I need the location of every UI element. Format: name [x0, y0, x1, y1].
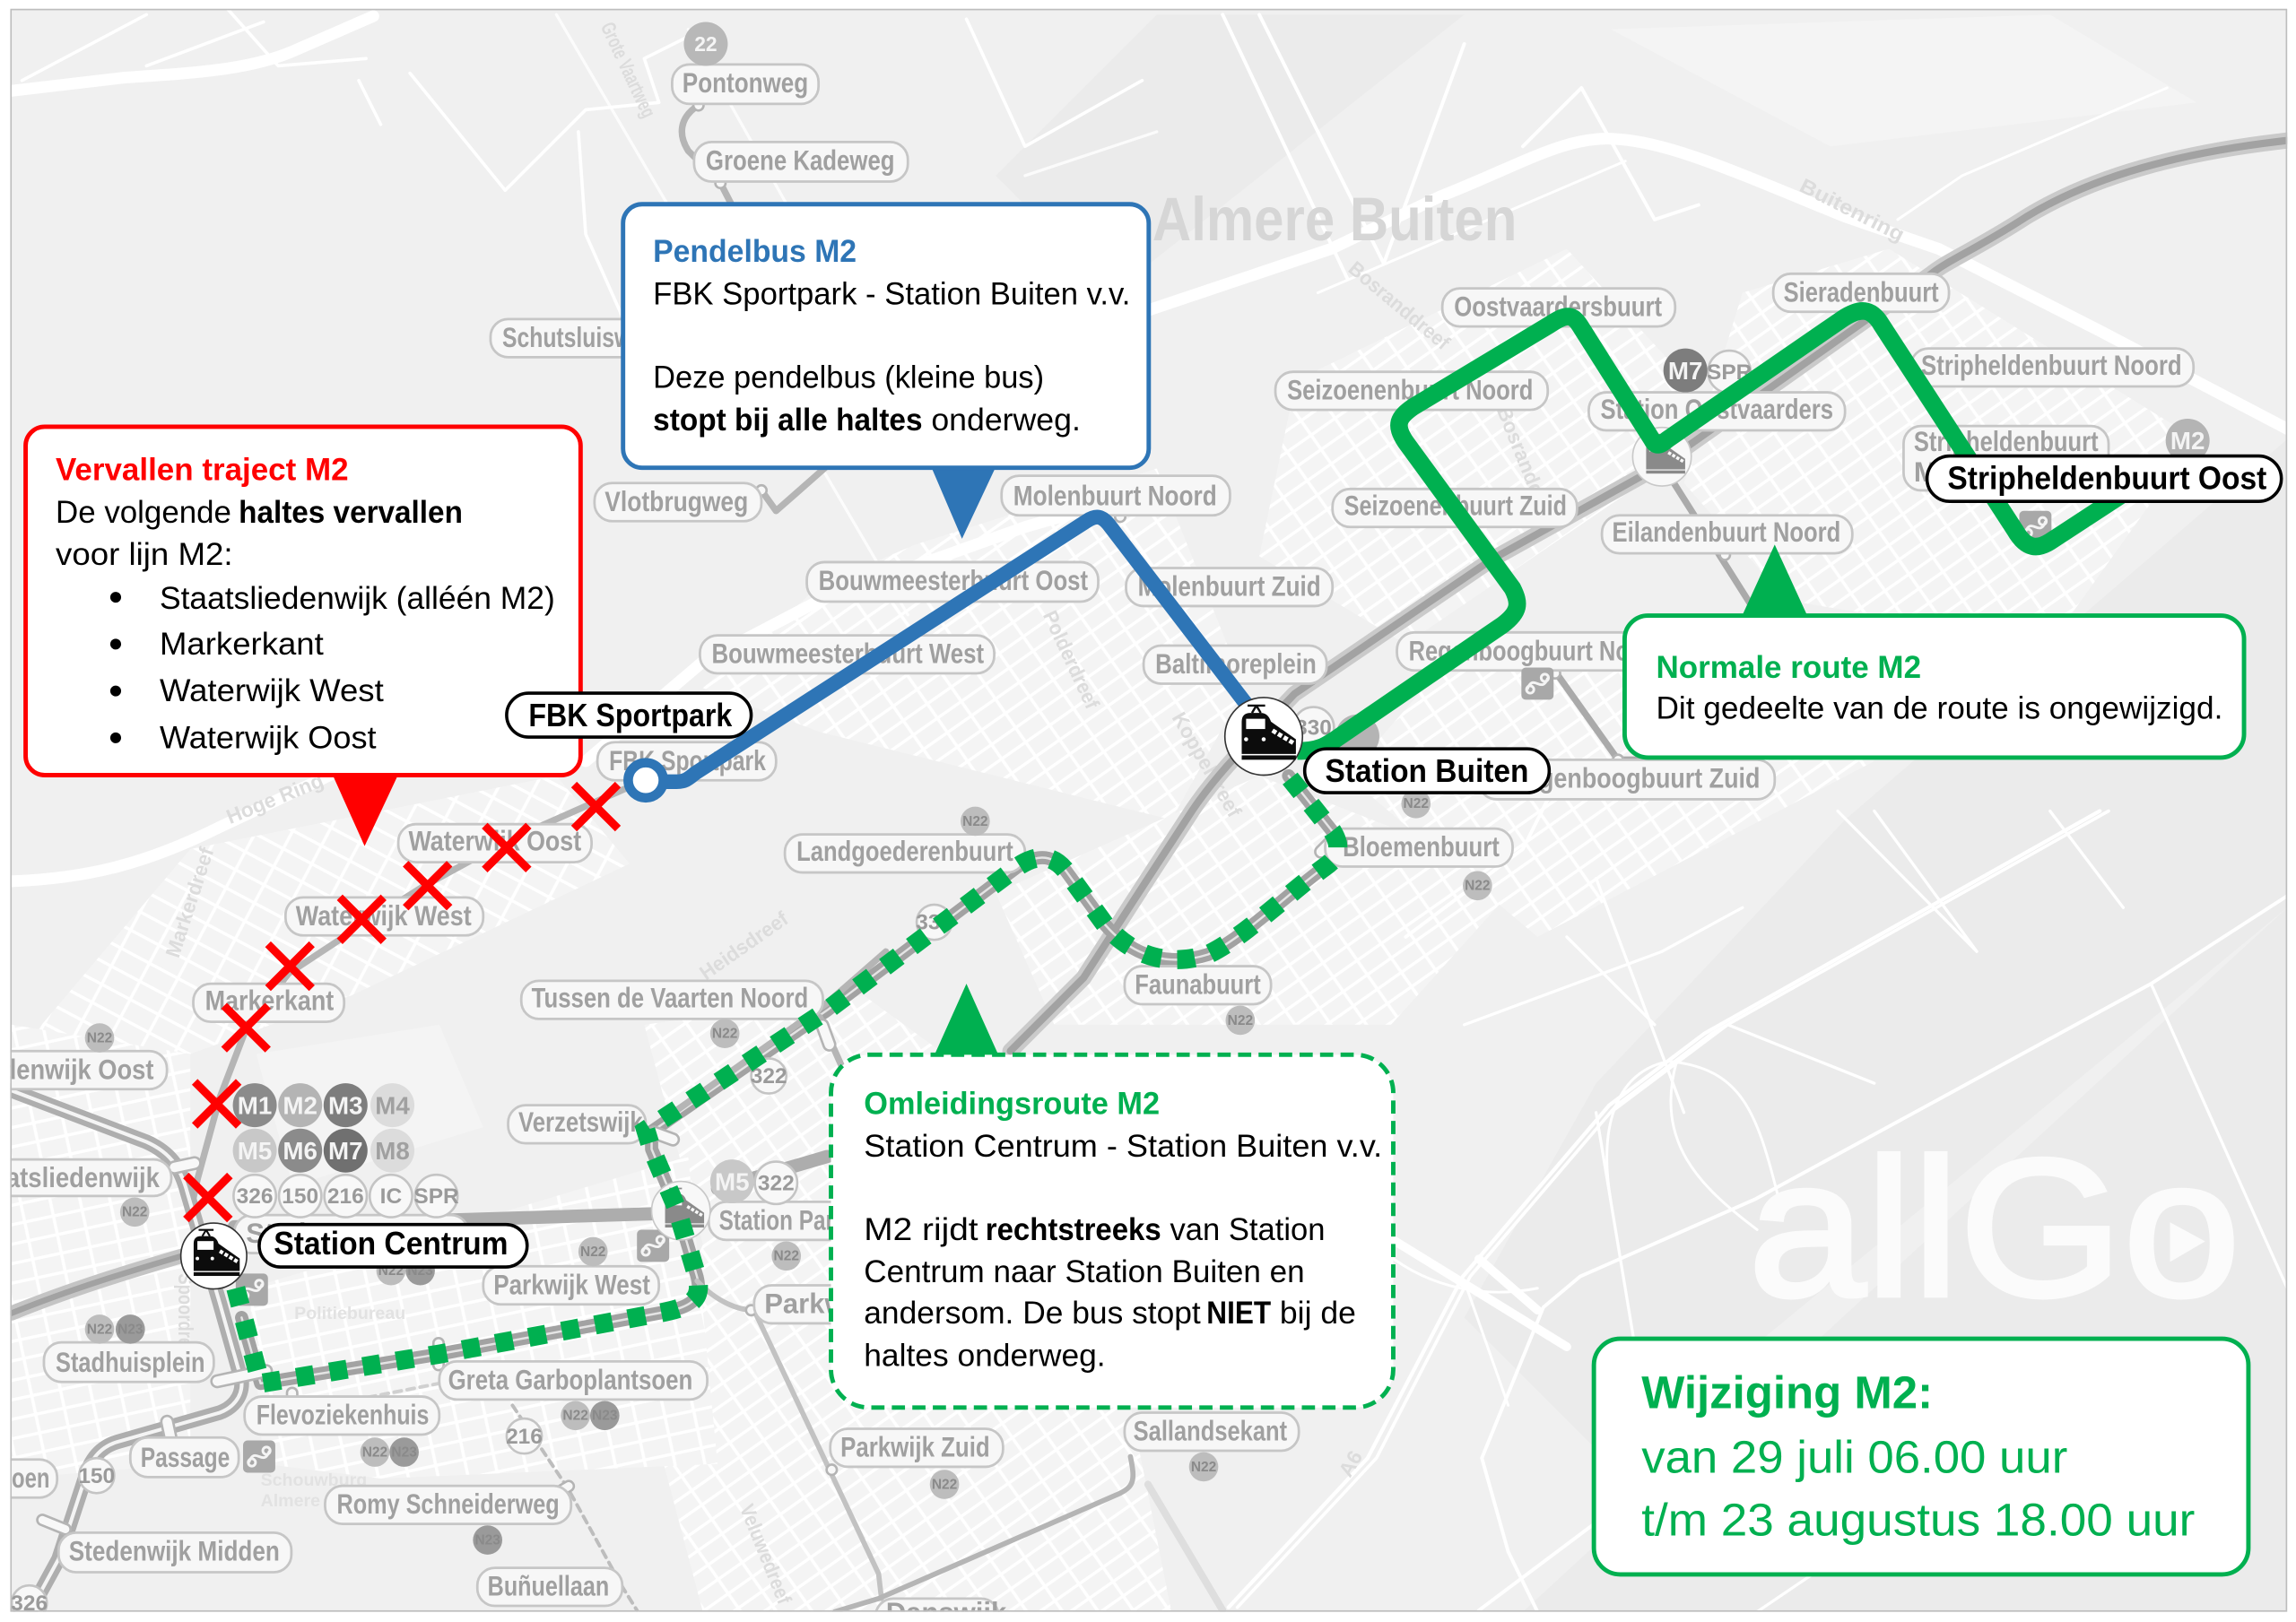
rail and road labels: Bosranddreef: [1492, 403, 1563, 534]
stop: FBK Sportpark: [597, 742, 776, 780]
badges: bus lines Station Centrum: 330: [916, 911, 952, 935]
rail and road labels: Buitenring: [1796, 174, 1909, 247]
badges: N22 and N23 night lines: N22: [712, 1027, 737, 1042]
badges: N22 and N23 night lines: N22: [562, 1409, 588, 1424]
stop: Station Centrum: Station Centrum: [246, 1218, 463, 1249]
rail and road labels: Hoge Ring: [222, 768, 326, 828]
badges: bus lines Station Centrum: 150: [282, 1184, 318, 1209]
panel: omleidingsroute M2: van Station: [1170, 1212, 1326, 1247]
badges: bus lines Station Centrum: SPR: [413, 1184, 459, 1209]
stop: Oostvaardersbuurt: Oostvaardersbuurt: [1454, 291, 1662, 323]
panel: vervallen traject M2: De volgende: [56, 495, 231, 530]
badges: metrobus lines Station Centrum: [233, 1083, 414, 1173]
stop: Romy Schneiderweg: Romy Schneiderweg: [337, 1488, 560, 1520]
rail and road labels: Politiebureau: [294, 1304, 405, 1323]
panel: omleidingsroute M2: bij de: [1280, 1296, 1356, 1331]
badges: N22 and N23 night lines: N22: [580, 1245, 605, 1260]
stop: Tussen de Vaarten Noord: Tussen de Vaarten Noord: [532, 982, 808, 1013]
panel: pendelbus M2: stopt bij alle haltes: [653, 403, 923, 438]
badges: metrobus lines Station Centrum: M5: [238, 1137, 272, 1165]
badges: bus lines Station Centrum: 330: [1295, 716, 1332, 741]
badges: N22 and N23 night lines: N22: [1465, 879, 1491, 894]
stop: Seizoenenbuurt Zuid: Seizoenenbuurt Zuid: [1344, 490, 1567, 522]
badges: N22 and N23 night lines: N22: [1191, 1460, 1216, 1475]
badges: bus lines Station Centrum: 150: [78, 1464, 115, 1488]
badges: N22 and N23 night lines: N23: [117, 1322, 144, 1337]
stop: Regenboogbuurt Noord: Regenboogbuurt Noord: [1409, 635, 1666, 666]
stop: Pontonweg: Pontonweg: [683, 67, 808, 99]
red crosses: cancelled stops: [186, 785, 618, 1219]
badges: N22 and N23 night lines: N23: [474, 1532, 500, 1548]
panel: pendelbus M2: Pendelbus M2: [653, 234, 857, 269]
stop: Bouwmeesterbuurt Oost: [807, 562, 1098, 602]
rail and road labels: A6: [1334, 1446, 1367, 1480]
stop: Groene Kadeweg: [694, 142, 908, 181]
stop: Groene Kadeweg: Groene Kadeweg: [706, 144, 895, 176]
panel: vervallen traject M2: voor lijn M2:: [56, 537, 233, 572]
rail and road labels: Markerdreef: [161, 844, 218, 960]
stop: Molenbuurt Zuid: Molenbuurt Zuid: [1138, 570, 1321, 602]
badges: N22 and N23 night lines: N23: [407, 1263, 433, 1279]
route: pendelbus M2 blue: [628, 517, 1257, 798]
stop markers: [36, 100, 1730, 1536]
stop: Parkwijk: Parkwijk: [764, 1288, 878, 1320]
stop: Parkwijk West: Parkwijk West: [493, 1269, 650, 1300]
stop: Regenboogbuurt Zuid: Regenboogbuurt Zuid: [1509, 762, 1760, 794]
rail and road labels: Heidsdreef: [695, 906, 793, 984]
stop: Romy Schneiderweg: [325, 1486, 571, 1524]
stop: Station Oostvaarders: Station Oostvaarders: [1600, 394, 1833, 425]
badge: 22: [683, 22, 727, 65]
stop: Landgoederenbuurt: Landgoederenbuurt: [796, 836, 1013, 867]
panel: wijziging M2 dates: Wijziging M2:: [1641, 1367, 1933, 1418]
stop: Molenbuurt Noord: [1002, 476, 1230, 516]
badges: metrobus lines Station Centrum: M8: [375, 1137, 410, 1165]
badges: bus lines Station Centrum: [11, 351, 1752, 1620]
stop: Schutsluisweg: [490, 317, 621, 359]
stop: Regenboogbuurt Zuid: [1479, 759, 1775, 799]
panel: pendelbus M2: Deze pendelbus (kleine bus): [653, 360, 1044, 395]
rail and road labels: [161, 19, 1909, 1608]
badges: N22 and N23 night lines: N23: [592, 1409, 618, 1424]
panel: normale route M2: [1624, 544, 2244, 758]
stop: Eilandenbuurt Noord: Eilandenbuurt Noord: [1613, 516, 1840, 548]
stop: FBK Sportpark: FBK Sportpark: [609, 745, 766, 776]
stop: Stripheldenbuurt Noord: Stripheldenbuurt Noord: [1921, 350, 2182, 381]
rail and road labels: Bosranddreef: [1344, 256, 1455, 354]
icon: Station Centrum train: [181, 1223, 247, 1289]
station label: Stripheldenbuurt Oost: Stripheldenbuurt Oost: [1947, 459, 2266, 496]
panel: omleidingsroute M2: M2 rijdt: [864, 1212, 978, 1247]
badges: M7, M5, M2: M5: [715, 1167, 750, 1195]
badges: N22 and N23 night lines: N23: [391, 1445, 417, 1461]
badges: bus lines Station Centrum: 216: [327, 1184, 364, 1209]
badges: N22 and N23 night lines: N22: [1404, 796, 1429, 811]
stop: Greta Garboplantsoen: Greta Garboplantsoen: [448, 1364, 692, 1395]
panel: pendelbus M2: FBK Sportpark - Station Buiten v.v.: [653, 277, 1130, 312]
stop: Stedenwijk Zuid fragment: [0, 1460, 57, 1497]
badges: bus lines Station Centrum: 322: [751, 1064, 787, 1089]
stop: Faunabuurt: Faunabuurt: [1135, 969, 1261, 1001]
panel: vervallen traject M2: haltes vervallen: [239, 495, 463, 530]
badges: bus lines Station Centrum: 326: [11, 1592, 48, 1616]
badges: N22 and N23 night lines: N22: [378, 1263, 404, 1279]
urban districts: [703, 468, 1245, 820]
stop: Passage: [130, 1437, 239, 1477]
stop: Seizoenenbuurt Zuid: [1333, 489, 1577, 527]
stop: Stripheldenbuurt Midden: [1903, 426, 2109, 490]
badges: bus lines Station Centrum: 322: [758, 1171, 795, 1195]
panel: omleidingsroute M2: rechtstreeks: [986, 1212, 1161, 1247]
stop: Stadhuisplein: [44, 1342, 213, 1382]
panel: normale route M2: Dit gedeelte van de route is ongewijzigd.: [1657, 691, 2222, 726]
stop: Station Parkwijk: Station Parkwijk: [719, 1204, 888, 1236]
stop: Pontonweg: [672, 65, 819, 104]
stop: Flevoziekenhuis: [245, 1397, 439, 1435]
badges: bus lines Station Centrum: 216: [506, 1425, 543, 1449]
panel: vervallen traject M2: Markerkant: [160, 627, 324, 662]
panel: vervallen traject M2: [26, 427, 580, 846]
stop: Stadhuisplein: Stadhuisplein: [56, 1347, 205, 1378]
station label: Station Centrum: Station Centrum: [274, 1225, 509, 1262]
badge: 22: 22: [694, 32, 718, 56]
rail and road labels: Grote Vaartweg: [596, 19, 661, 121]
badges: N22 and N23 night lines: N22: [962, 814, 988, 829]
rail and road labels: Polderdreef: [1039, 607, 1104, 713]
panel: omleidingsroute M2: [831, 984, 1393, 1408]
rail and road labels: Veluwedreef: [735, 1501, 796, 1608]
stop: Sieradenbuurt: Sieradenbuurt: [1784, 276, 1939, 308]
badges: N22 and N23 night lines: N22: [774, 1249, 799, 1264]
stop: Verzetswijk: [509, 1106, 646, 1143]
badges: bus lines Station Centrum: SPR: [1707, 360, 1752, 385]
panel: vervallen traject M2: Waterwijk West: [160, 673, 384, 708]
stop: Parkwijk Zuid: Parkwijk Zuid: [840, 1432, 990, 1463]
icon: Station Buiten train: [1225, 698, 1302, 775]
badges: M7, M5, M2: M7: [1668, 357, 1702, 385]
badges: N22 and N23 night lines: N22: [1228, 1013, 1253, 1028]
panel: pendelbus M2: onderweg.: [931, 403, 1081, 438]
badges: M7, M5, M2: [710, 349, 2210, 1203]
panel: vervallen traject M2: Waterwijk Oost: [160, 720, 377, 755]
stop: Schutsluisweg: Schutsluisweg: [502, 322, 657, 353]
badges: metrobus lines Station Centrum: M1: [238, 1091, 272, 1119]
panel: wijziging M2 dates: van 29 juli 06.00 uur: [1641, 1431, 2067, 1482]
stop: Stedenwijk Midden: [58, 1532, 291, 1572]
badges: N22 and N23 night lines: N22: [122, 1205, 147, 1220]
panel: omleidingsroute M2: haltes onderweg.: [864, 1338, 1106, 1373]
badges: N22 and N23 night lines: N22: [87, 1322, 112, 1337]
badges: metrobus lines Station Centrum: M4: [375, 1091, 410, 1119]
icons: gray P+R loop signs: [236, 511, 2051, 1472]
stop: Passage: Passage: [141, 1442, 230, 1473]
stop: Bouwmeesterbuurt West: Bouwmeesterbuurt West: [711, 638, 984, 670]
rail and road labels: Almere Buiten: [1152, 185, 1517, 254]
railway line: [12, 141, 2287, 1314]
badges: N22 and N23 night lines: N22: [87, 1030, 112, 1045]
stop: Seizoenenbuurt Noord: Seizoenenbuurt Noord: [1287, 375, 1533, 406]
badges: metrobus lines Station Centrum: M6: [283, 1137, 317, 1165]
badges: M7, M5, M2: M2: [2170, 427, 2205, 455]
rail and road labels: Almere: [261, 1491, 320, 1511]
stop: Markerkant: Markerkant: [205, 985, 334, 1017]
stop: Bloemenbuurt: [1326, 828, 1513, 867]
badges: N22 and N23 night lines: N22: [362, 1445, 387, 1461]
stop: Station Parkwijk: [709, 1201, 899, 1240]
panel: wijziging M2 dates: t/m 23 augustus 18.00 uur: [1641, 1495, 2195, 1546]
panel: omleidingsroute M2: andersom. De bus stopt: [864, 1296, 1201, 1331]
stop: Waterwijk Oost: Waterwijk Oost: [409, 826, 581, 857]
stop: Verzetswijk: Verzetswijk: [518, 1106, 643, 1138]
stop: Flevoziekenhuis: Flevoziekenhuis: [257, 1400, 429, 1431]
route: normal M2 green: [1298, 311, 2126, 751]
stop: Bouwmeesterbuurt Oost: Bouwmeesterbuurt Oost: [819, 565, 1088, 596]
stop: Stripheldenbuurt Midden: Midden: [1914, 456, 2011, 488]
icon: Station Parkwijk train: [652, 1182, 710, 1240]
station label: FBK Sportpark: FBK Sportpark: [528, 697, 732, 733]
stop: Stedenwijk Zuid fragment: oen: [12, 1462, 50, 1494]
rail and road labels: Koppeldreef: [1168, 708, 1247, 821]
route: diversion M2 dashed green: [236, 773, 1338, 1383]
badges: metrobus lines Station Centrum: M2: [283, 1091, 317, 1119]
stop: Stripheldenbuurt Midden: Stripheldenbuurt: [1914, 426, 2099, 457]
panel: pendelbus M2: [623, 204, 1149, 539]
stop: Vlotbrugweg: Vlotbrugweg: [604, 486, 748, 517]
stop: Molenbuurt Noord: Molenbuurt Noord: [1013, 480, 1217, 511]
stop: Bloemenbuurt: Bloemenbuurt: [1343, 831, 1500, 863]
panel: omleidingsroute M2: Centrum naar Station Buiten en: [864, 1254, 1305, 1289]
stop: Buñuellaan: Buñuellaan: [488, 1571, 609, 1602]
panel: wijziging M2 dates: [1594, 1339, 2248, 1574]
panel: normale route M2: Normale route M2: [1657, 650, 1921, 685]
badges: metrobus lines Station Centrum: M7: [328, 1137, 363, 1165]
panel: vervallen traject M2: Vervallen traject M2: [56, 453, 349, 488]
logo: allGo: allGo: [1748, 1119, 2240, 1338]
badges: N22 and N23 night lines: N22: [932, 1477, 957, 1492]
stop: Baltimoreplein: Baltimoreplein: [1155, 648, 1317, 680]
badges: N22 and N23 night lines: [85, 789, 1492, 1555]
badges: bus lines Station Centrum: 326: [237, 1184, 273, 1209]
rail and road labels: Schouwburg: [261, 1470, 367, 1490]
panel: omleidingsroute M2: Station Centrum - Station Buiten v.v.: [864, 1129, 1382, 1164]
stop: Sallandsekant: Sallandsekant: [1134, 1416, 1287, 1447]
stop: Stedenwijk Midden: Stedenwijk Midden: [69, 1535, 280, 1566]
panel: omleidingsroute M2: NIET: [1206, 1296, 1272, 1331]
badges: metrobus lines Station Centrum: M3: [328, 1091, 363, 1119]
stop: Regenboogbuurt Noord: [1396, 631, 1623, 672]
logo: allGo: [1755, 1151, 2233, 1300]
stop: Waterwijk West: Waterwijk West: [296, 900, 472, 932]
badges: bus lines Station Centrum: IC: [380, 1184, 402, 1209]
icon: Station Oostvaarders train: [1632, 428, 1692, 486]
station label: Station Buiten: Station Buiten: [1326, 752, 1528, 789]
panel: vervallen traject M2: Staatsliedenwijk (alléén M2): [160, 581, 555, 616]
panel: omleidingsroute M2: Omleidingsroute M2: [864, 1086, 1160, 1121]
bus lines: [12, 106, 1750, 1612]
rail and road labels: Spoordreef: [174, 1273, 197, 1362]
